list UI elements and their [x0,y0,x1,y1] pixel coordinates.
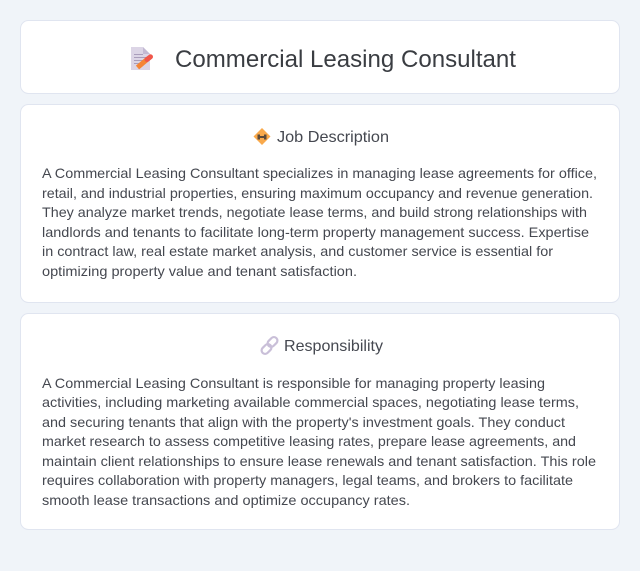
heading: responsibility: Responsibility [284,338,383,355]
panel: job description [20,104,620,302]
text: job description body: landlords and tenants to facilitate long-term property management success. Expertise [42,224,589,240]
text: responsibility body: and securing tenants that align with the property's investment goals. They conduct [42,414,565,430]
text: responsibility body: smooth lease transactions and optimize occupancy rates. [42,492,410,508]
text: job description body: in contract law, real estate market analysis, and customer service is essential for [42,243,553,259]
text: job description body: A Commercial Leasing Consultant specializes in managing lease agreements for office, [42,165,597,181]
icon: chain link [260,336,279,355]
text: job description body: optimizing property value and tenant satisfaction. [42,263,357,279]
text: job description body [42,165,597,279]
text: job description body: They analyze market trends, negotiate lease terms, and build strong relationships with [42,204,587,220]
heading: title: Commercial Leasing Consultant [175,46,516,73]
text: responsibility body: market research to assess competitive leasing rates, prepare lease agreements, and [42,433,576,449]
panel: responsibility [20,314,620,530]
text: responsibility body: A Commercial Leasing Consultant is responsible for managing property leasing [42,375,545,391]
text: job description body: retail, and industrial properties, ensuring maximum occupancy and revenue generation. [42,185,593,201]
panel: title [20,20,620,94]
text: responsibility body [42,375,596,508]
text: responsibility body: maintain client relationships to ensure lease renewals and tenant satisfaction. This role [42,453,596,469]
text: responsibility body: requires collaboration with property managers, legal teams, and brokers to facilitate [42,472,573,488]
heading: job description: Job Description [277,129,389,146]
text: responsibility body: activities, including marketing available commercial spaces, negotiating lease terms, [42,394,579,410]
icon: document with pencil [131,47,150,70]
icon: diamond sign [254,128,270,145]
